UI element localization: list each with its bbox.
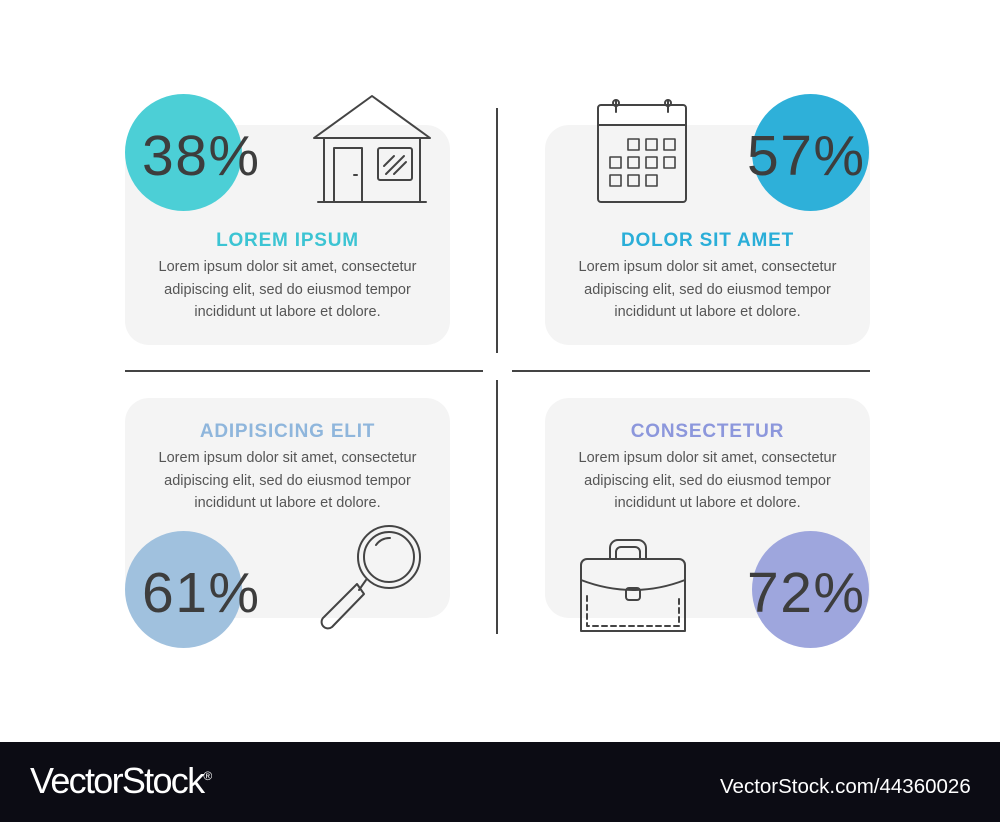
divider horizontal left <box>125 370 483 372</box>
percent 72: 72% <box>747 561 866 625</box>
circle 38 <box>125 94 242 211</box>
circle 72 <box>752 531 869 648</box>
heading: consectetur: CONSECTETUR <box>631 421 784 442</box>
text top right <box>579 259 836 320</box>
divider vertical top <box>496 108 498 353</box>
text bottom right: adipiscing elit, sed do eiusmod tempor <box>584 472 831 488</box>
text bottom right: incididunt ut labore et dolore. <box>614 495 801 511</box>
text top left: Lorem ipsum dolor sit amet, consectetur <box>159 259 416 275</box>
panel: bottom right <box>545 398 870 618</box>
circle 61 <box>125 531 242 648</box>
divider vertical bottom <box>496 380 498 634</box>
heading: lorem ipsum: LOREM IPSUM <box>216 230 359 251</box>
footer url: VectorStock.com/44360026 <box>720 775 971 798</box>
text bottom left: adipiscing elit, sed do eiusmod tempor <box>164 472 411 488</box>
divider horizontal right <box>512 370 870 372</box>
icon: house <box>314 96 430 202</box>
text top left: incididunt ut labore et dolore. <box>194 304 381 320</box>
percent 61: 61% <box>142 561 261 625</box>
icon: magnifier <box>322 526 420 628</box>
panel: bottom left <box>125 398 450 618</box>
text bottom left: incididunt ut labore et dolore. <box>194 495 381 511</box>
icon: briefcase <box>581 540 685 631</box>
text top right: incididunt ut labore et dolore. <box>614 304 801 320</box>
text top right: adipiscing elit, sed do eiusmod tempor <box>584 282 831 298</box>
text top left: adipiscing elit, sed do eiusmod tempor <box>164 282 411 298</box>
text bottom right <box>579 450 836 511</box>
circle 57 <box>752 94 869 211</box>
percent 57: 57% <box>747 124 866 188</box>
panel: top right <box>545 125 870 345</box>
heading: adipisicing elit: ADIPISICING ELIT <box>200 421 375 442</box>
percent 38: 38% <box>142 124 261 188</box>
text top left <box>159 259 416 320</box>
text bottom left <box>159 450 416 511</box>
footer bar <box>0 742 1000 822</box>
text top right: Lorem ipsum dolor sit amet, consectetur <box>579 259 836 275</box>
heading: dolor sit amet: DOLOR SIT AMET <box>621 230 794 251</box>
text bottom left: Lorem ipsum dolor sit amet, consectetur <box>159 450 416 466</box>
panel: top left <box>125 125 450 345</box>
footer logo: VectorStock® <box>30 760 211 801</box>
icon: calendar <box>598 100 686 202</box>
text bottom right: Lorem ipsum dolor sit amet, consectetur <box>579 450 836 466</box>
